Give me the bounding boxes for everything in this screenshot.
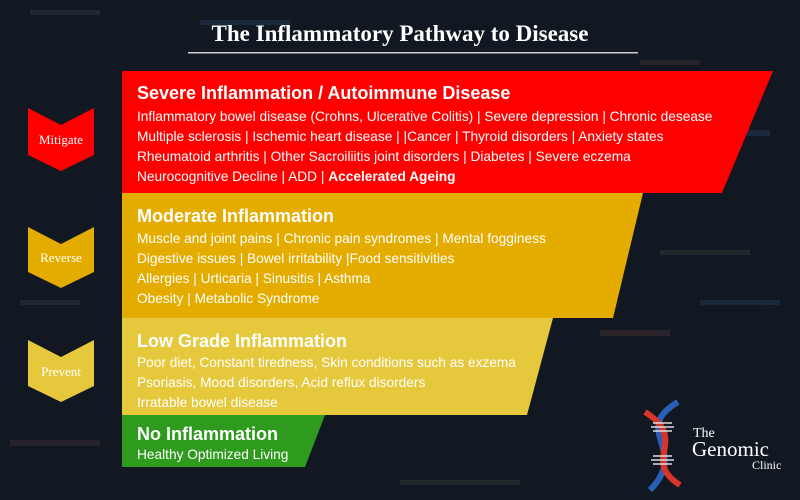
panel: moderate inflammation: Muscle and joint pains | Chronic pain syndromes | Mental fogginess <box>137 231 546 246</box>
icon: mitigate chevron: Mitigate <box>39 132 83 147</box>
panel: no inflammation <box>122 415 325 467</box>
panel: low grade inflammation: Irratable bowel disease <box>137 395 278 410</box>
logo: the genomic clinic: Clinic <box>752 458 781 472</box>
icon: reverse chevron <box>28 227 94 288</box>
panel: severe inflammation: Severe Inflammation / Autoimmune Disease <box>137 83 510 103</box>
panel: severe inflammation: Rheumatoid arthritis | Other Sacroiliitis joint disorders | Diabetes | Severe eczema <box>137 149 631 164</box>
icon: mitigate chevron <box>28 108 94 171</box>
logo: the genomic clinic <box>645 402 781 490</box>
panel: moderate inflammation: Allergies | Urticaria | Sinusitis | Asthma <box>137 271 371 286</box>
title: The Inflammatory Pathway to Disease <box>212 21 588 46</box>
panel: severe inflammation: Multiple sclerosis | Ischemic heart disease | |Cancer | Thyroid disorders | Anxiety states <box>137 129 664 144</box>
panel: no inflammation: Healthy Optimized Living <box>137 447 288 462</box>
panel: severe inflammation <box>122 71 773 193</box>
panel: moderate inflammation: Digestive issues | Bowel irritability |Food sensitivities <box>137 251 455 266</box>
panel: low grade inflammation: Psoriasis, Mood disorders, Acid reflux disorders <box>137 375 425 390</box>
logo: the genomic clinic: Genomic <box>692 437 769 461</box>
panel: moderate inflammation: Moderate Inflammation <box>137 206 334 226</box>
icon: prevent chevron: Prevent <box>41 364 81 379</box>
logo: the genomic clinic: The <box>693 426 715 441</box>
panel: severe inflammation: Neurocognitive Decline | ADD | Accelerated Ageing <box>137 169 456 184</box>
icon: prevent chevron <box>28 340 94 402</box>
panel: low grade inflammation <box>122 318 553 415</box>
panel: no inflammation: No Inflammation <box>137 424 278 444</box>
panel: moderate inflammation: Obesity | Metabolic Syndrome <box>137 291 319 306</box>
panel: low grade inflammation: Poor diet, Constant tiredness, Skin conditions such as exzema <box>137 355 516 370</box>
icon: reverse chevron: Reverse <box>40 250 82 265</box>
panel: moderate inflammation <box>122 193 643 318</box>
panel: severe inflammation: Inflammatory bowel disease (Crohns, Ulcerative Colitis) | Severe depression | Chronic desease <box>137 109 712 124</box>
panel: low grade inflammation: Low Grade Inflammation <box>137 331 347 351</box>
